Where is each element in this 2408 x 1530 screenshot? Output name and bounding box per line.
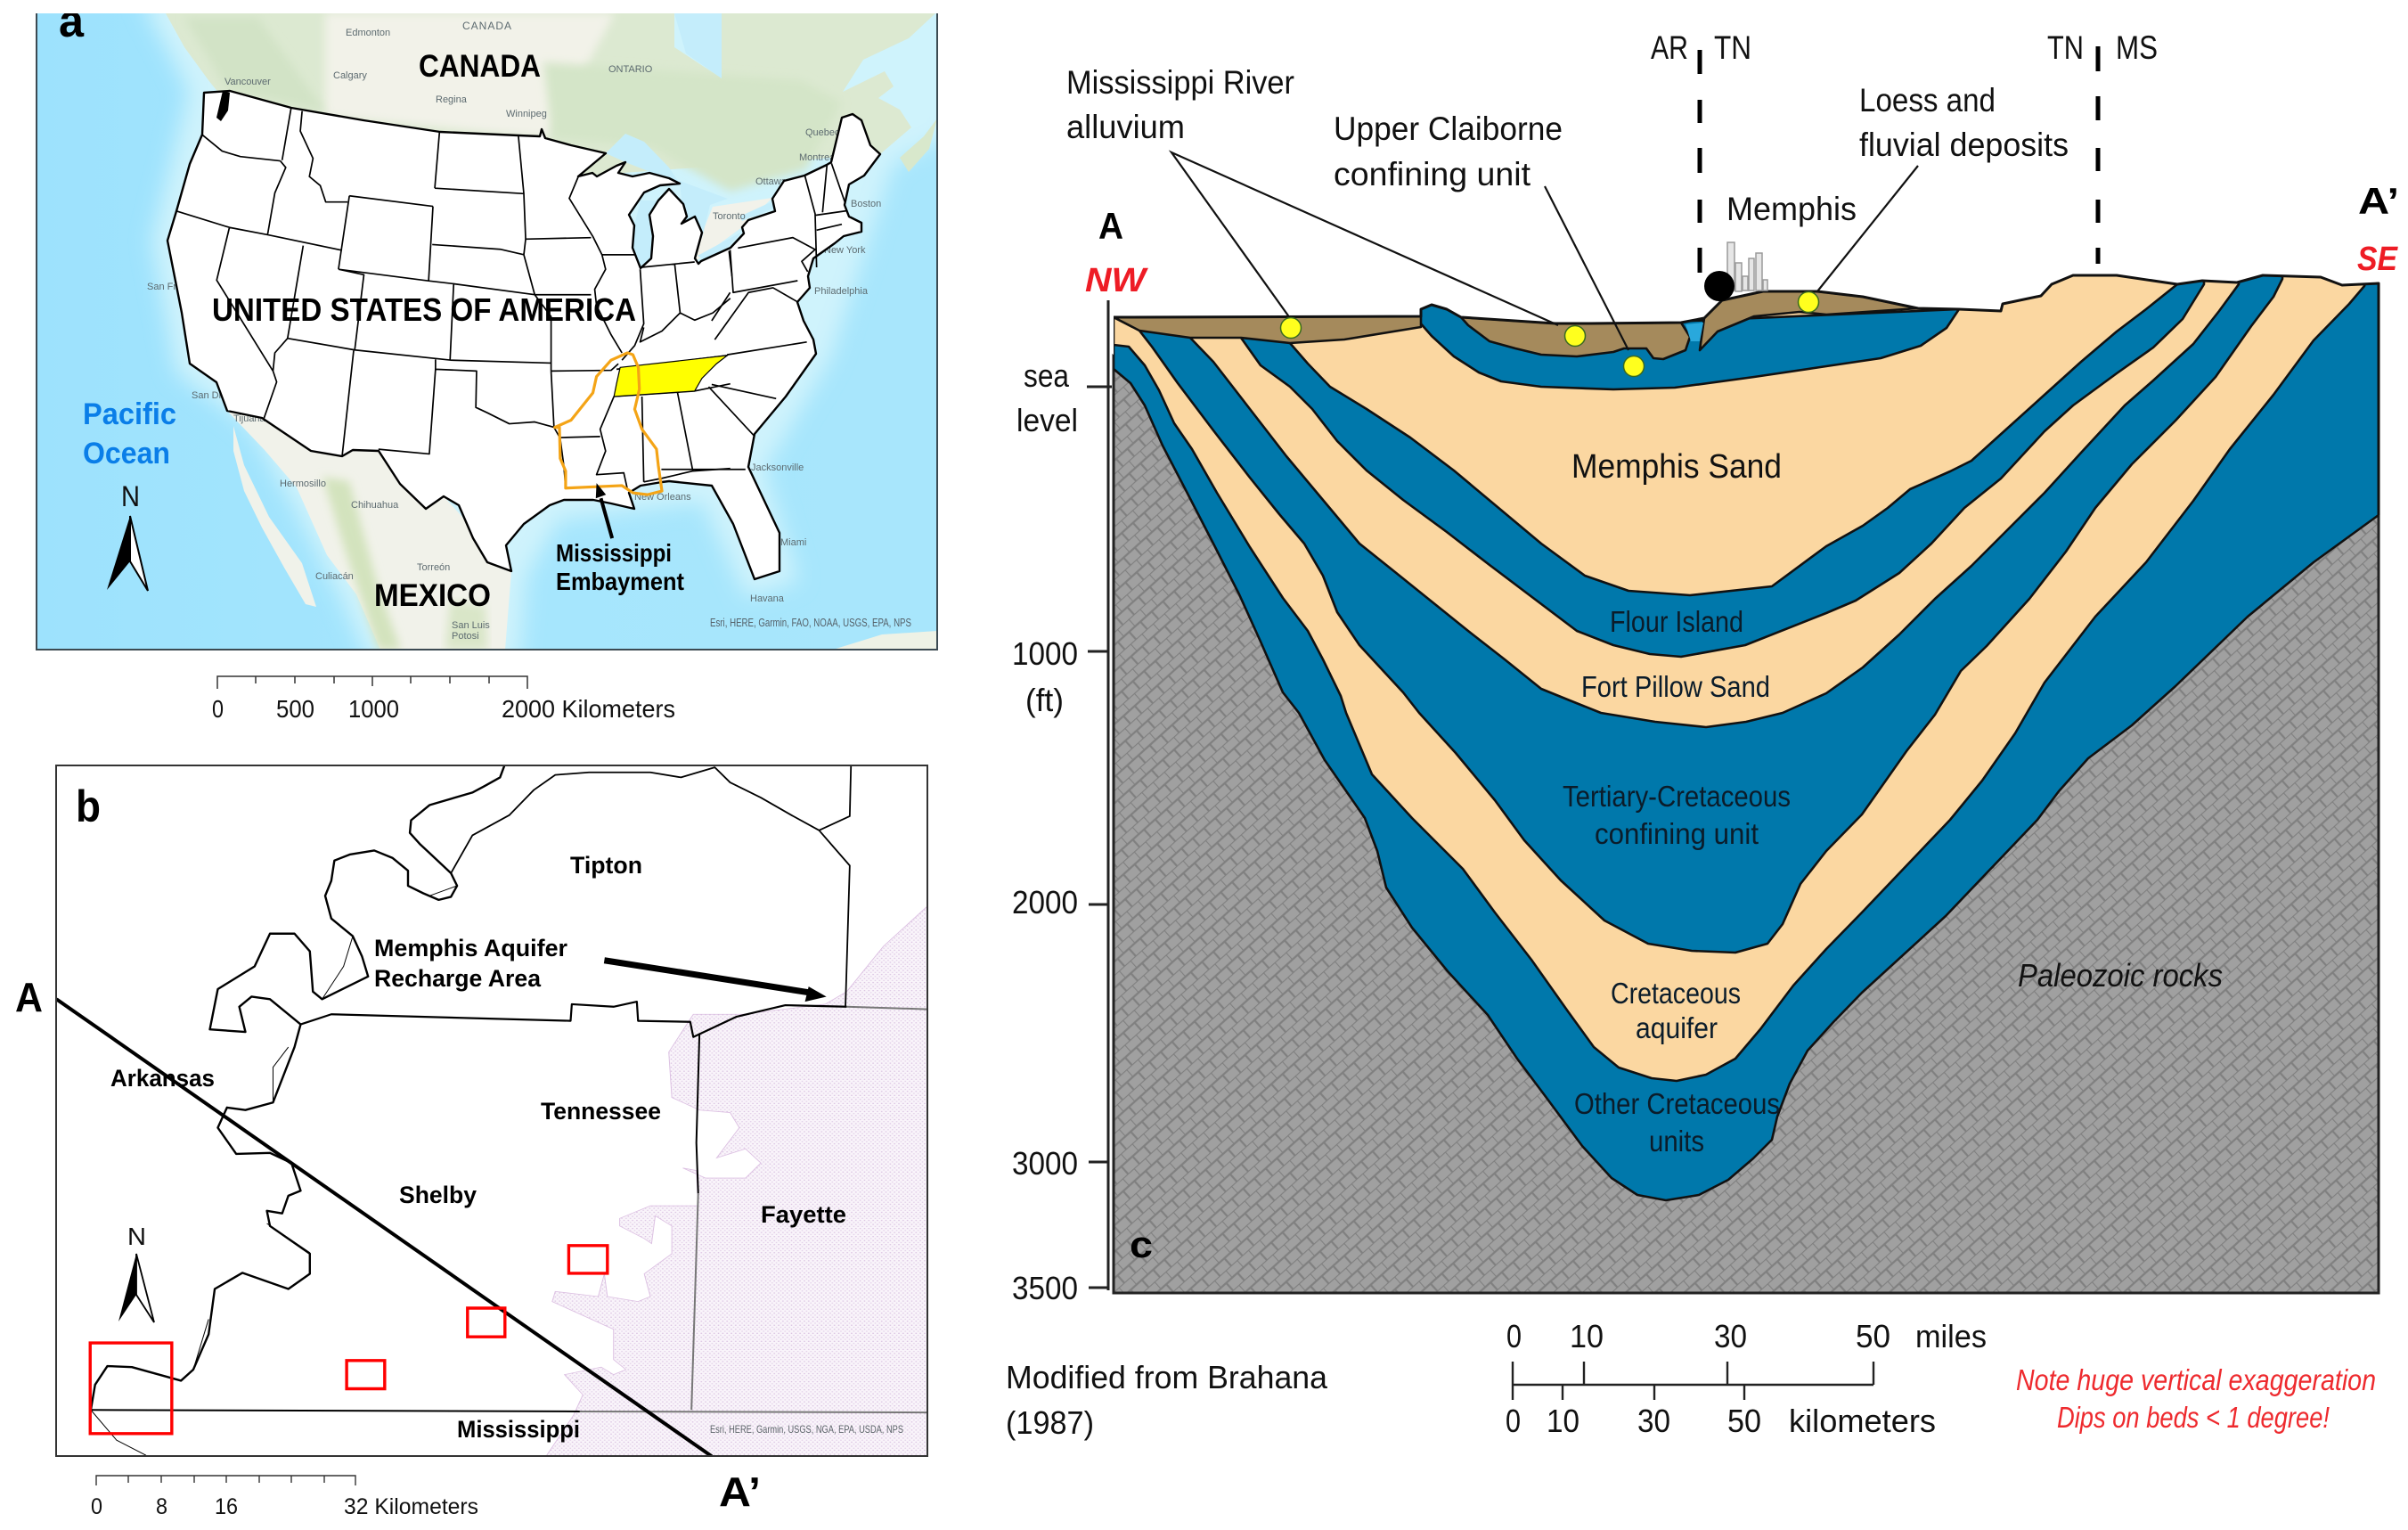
basemap place names — [147, 20, 881, 642]
panel a: map of the United States — [37, 0, 937, 650]
state boundaries northeast — [729, 163, 846, 276]
label: section end A prime: A’ — [2358, 180, 2399, 222]
confining and aquifer labels: Fort Pillow Sand — [1581, 670, 1770, 703]
basemap place names: ONTARIO — [608, 64, 653, 75]
confining and aquifer labels: aquifer — [1636, 1011, 1718, 1044]
basemap place names: Regina — [436, 94, 468, 105]
icon: north arrow: N — [121, 480, 140, 512]
basemap place names: Ottawa — [755, 176, 788, 187]
Mississippi River alluvium — [1114, 316, 1421, 343]
scale bar: panel c: 0 — [1506, 1318, 1522, 1354]
yellow location markers — [1281, 292, 1819, 376]
scale bar: panel a: 1000 — [348, 695, 399, 723]
scale bar: panel b — [91, 1476, 478, 1519]
county and state labels — [110, 852, 846, 1443]
scale bar: panel a: 0 — [212, 695, 224, 723]
depth axis labels: (ft) — [1025, 682, 1064, 718]
depth axis labels: level — [1016, 402, 1078, 438]
scale bar: panel b: 0 — [91, 1494, 102, 1519]
scale bar: panel c — [1506, 1318, 1987, 1439]
Memphis skyline — [1727, 242, 1767, 291]
panel a border — [37, 13, 937, 650]
state labels: TN — [1714, 29, 1751, 66]
leader lines — [1171, 152, 1918, 350]
scale bar: panel b: 8 — [156, 1494, 167, 1519]
upper Claiborne confining unit — [1419, 305, 1959, 389]
label: Pacific Ocean — [84, 402, 175, 463]
A to A prime section line — [56, 999, 712, 1456]
confining and aquifer labels: Tertiary-Cretaceous — [1563, 780, 1791, 813]
arrow to recharge area — [604, 961, 827, 1002]
study area boxes — [90, 1246, 608, 1434]
basemap place names: CANADA — [462, 20, 512, 32]
label: section end A: A — [1098, 205, 1123, 247]
depth axis labels: 2000 — [1012, 884, 1078, 920]
scale bar: panel a: 2000 Kilometers — [502, 695, 675, 723]
county and state labels: Fayette — [761, 1201, 846, 1228]
lakes — [606, 13, 775, 268]
confining and aquifer labels: Cretaceous — [1611, 977, 1741, 1010]
basemap place names: Torreón — [417, 562, 450, 573]
basemap place names: Toronto — [713, 211, 746, 222]
basemap place names: New York — [824, 245, 866, 256]
basemap place names: Havana — [750, 593, 785, 604]
label: Pacific Ocean: Pacific — [83, 397, 176, 431]
callout labels above section: Upper Claiborne — [1334, 110, 1563, 147]
Mississippi Embayment outline — [555, 353, 662, 495]
state labels: AR — [1651, 29, 1688, 66]
scale bar: panel b: 32 Kilometers — [344, 1494, 478, 1519]
source note: Modified from Brahana — [1006, 1359, 1328, 1395]
scale bar: panel c: 10 — [1570, 1318, 1604, 1354]
land basemap — [166, 13, 937, 650]
vertical axis with ticks — [1087, 300, 1112, 1290]
depth axis labels — [1012, 357, 1078, 1306]
panel c: geologic cross section — [1006, 29, 2399, 1441]
depth axis labels: sea — [1024, 357, 1070, 394]
label: panel c: c — [1130, 1223, 1153, 1265]
scale bar: panel a — [212, 676, 675, 723]
depth axis labels: 3500 — [1012, 1270, 1078, 1306]
scale bar: panel c: 30 — [1714, 1318, 1747, 1354]
basemap place names: Calgary — [333, 70, 367, 81]
ocean background — [37, 13, 937, 650]
confining and aquifer labels: Flour Island — [1610, 605, 1743, 638]
panel b: Memphis area map — [56, 765, 927, 1456]
land surface line — [1114, 275, 2379, 515]
confining and aquifer labels: Other Cretaceous — [1574, 1087, 1780, 1120]
county and state labels: Mississippi — [457, 1416, 580, 1443]
state labels: TN — [2047, 29, 2084, 66]
label: Paleozoic rocks: Paleozoic rocks — [2018, 957, 2223, 994]
Flour Island confining unit — [1241, 267, 2204, 657]
basemap place names: Winnipeg — [506, 109, 547, 119]
label: section end A prime (map): A’ — [719, 1469, 761, 1515]
state labels: MS — [2116, 29, 2158, 66]
contiguous United States — [167, 91, 880, 579]
scale bar: panel c: kilometers — [1789, 1403, 1936, 1439]
county and state labels: Arkansas — [110, 1065, 215, 1092]
loess and fluvial deposits — [1700, 291, 1918, 350]
Fort Pillow Sand — [1190, 267, 2239, 727]
basemap place names: Tijuana — [233, 413, 266, 424]
scale bar: panel c: 30 — [1637, 1403, 1670, 1439]
label: SE: SE — [2357, 241, 2398, 278]
Tennessee highlight — [614, 356, 727, 397]
basemap place names: Vancouver — [224, 77, 271, 87]
coastal shallows — [166, 13, 937, 650]
basemap place names: San Diego — [192, 390, 237, 401]
basemap place names: Boston — [851, 199, 881, 209]
basemap place names: San Francisco — [147, 282, 209, 292]
label: section end A (map): A — [15, 974, 43, 1020]
scale bar: panel b: 16 — [215, 1494, 238, 1519]
basemap place names: Edmonton — [346, 28, 390, 38]
callout labels above section: Mississippi River — [1066, 64, 1294, 101]
icon: north arrow: N — [127, 1223, 146, 1250]
basemap place names: New Orleans — [634, 492, 691, 503]
label: panel b: b — [76, 781, 101, 831]
scale bar: panel c: 50 — [1856, 1318, 1890, 1354]
label: Mississippi Embayment — [556, 539, 684, 595]
icon: north arrow — [107, 480, 148, 591]
icon: north arrow — [118, 1223, 154, 1322]
map credit: Esri, HERE, Garmin, USGS, NGA, EPA, USDA, NPS — [710, 1423, 903, 1436]
Cretaceous aquifer — [1114, 267, 2370, 1081]
label: Canada: CANADA — [419, 49, 541, 84]
Memphis Aquifer recharge area stipple — [546, 906, 927, 1456]
Memphis Sand — [1290, 267, 2177, 595]
callout labels above section: Loess and — [1859, 82, 1996, 119]
label: NW: NW — [1085, 262, 1148, 299]
county and state labels: Memphis Aquifer — [374, 935, 567, 961]
depth axis labels: 1000 — [1012, 635, 1078, 672]
state boundaries east — [661, 250, 807, 470]
confining and aquifer labels — [1563, 605, 1791, 1158]
basemap place names: Montreal — [799, 152, 837, 163]
state boundaries west and central — [176, 108, 731, 489]
river channel — [1686, 323, 1703, 341]
callout labels above section: confining unit — [1334, 156, 1531, 192]
arrow to embayment — [596, 483, 612, 538]
callout labels above section: Memphis — [1726, 191, 1857, 227]
basemap place names: San Luis — [452, 620, 490, 631]
county and state labels: Tipton — [570, 852, 642, 879]
depth axis labels: 3000 — [1012, 1145, 1078, 1182]
icon: Puget Sound — [216, 91, 230, 121]
state labels — [1651, 29, 2158, 66]
confining and aquifer labels: confining unit — [1595, 817, 1759, 850]
panel b frame — [56, 765, 927, 1456]
red note on vertical exaggeration — [2016, 1363, 2376, 1434]
label: Mississippi Embayment: Embayment — [556, 568, 684, 595]
basemap place names: Hermosillo — [280, 479, 326, 489]
county and state labels: Tennessee — [541, 1098, 661, 1125]
label: United States of America: UNITED STATES OF AMERICA — [212, 291, 636, 328]
basemap place names: Jacksonville — [751, 462, 804, 473]
Tertiary-Cretaceous confining unit — [1139, 267, 2282, 953]
other Cretaceous units — [1114, 267, 2379, 1200]
red note on vertical exaggeration: Dips on beds < 1 degree! — [2057, 1401, 2330, 1434]
callout labels above section: alluvium — [1066, 109, 1185, 145]
label: Mexico: MEXICO — [374, 578, 491, 613]
county and state labels: Shelby — [399, 1182, 477, 1208]
Memphis location dot — [1704, 271, 1735, 301]
scale bar: panel a: 500 — [276, 695, 314, 723]
state line dashes — [1700, 46, 2098, 273]
basemap place names: Culiacán — [315, 571, 354, 582]
Paleozoic rocks hatched basement — [1114, 356, 2379, 1293]
map credit: Esri, HERE, Garmin, FAO, NOAA, USGS, EPA, NPS — [710, 616, 911, 629]
source note: (1987) — [1006, 1404, 1094, 1441]
layer label: Memphis Sand: Memphis Sand — [1571, 448, 1782, 486]
aquifer and confining layers — [1114, 267, 2379, 1200]
basemap place names: Philadelphia — [814, 286, 869, 297]
basemap place names: Miami — [780, 537, 806, 548]
confining and aquifer labels: units — [1649, 1125, 1704, 1158]
scale bar: panel c: 0 — [1506, 1403, 1521, 1439]
basemap place names: Quebec — [805, 127, 840, 138]
scale bar: panel c: 10 — [1547, 1403, 1579, 1439]
basemap place names: Potosi — [452, 631, 479, 642]
label: Pacific Ocean: Ocean — [83, 437, 170, 470]
callout labels above section — [1066, 64, 2069, 227]
scale bar: panel c: miles — [1915, 1318, 1987, 1354]
callout labels above section: fluvial deposits — [1859, 127, 2069, 163]
scale bar: panel c: 50 — [1727, 1403, 1761, 1439]
county and state labels: Recharge Area — [374, 965, 542, 992]
label: Mississippi Embayment: Mississippi — [556, 539, 672, 567]
rivers and county boundaries — [91, 765, 927, 1455]
basemap place names: Chihuahua — [351, 500, 399, 511]
source note — [1006, 1359, 1328, 1441]
